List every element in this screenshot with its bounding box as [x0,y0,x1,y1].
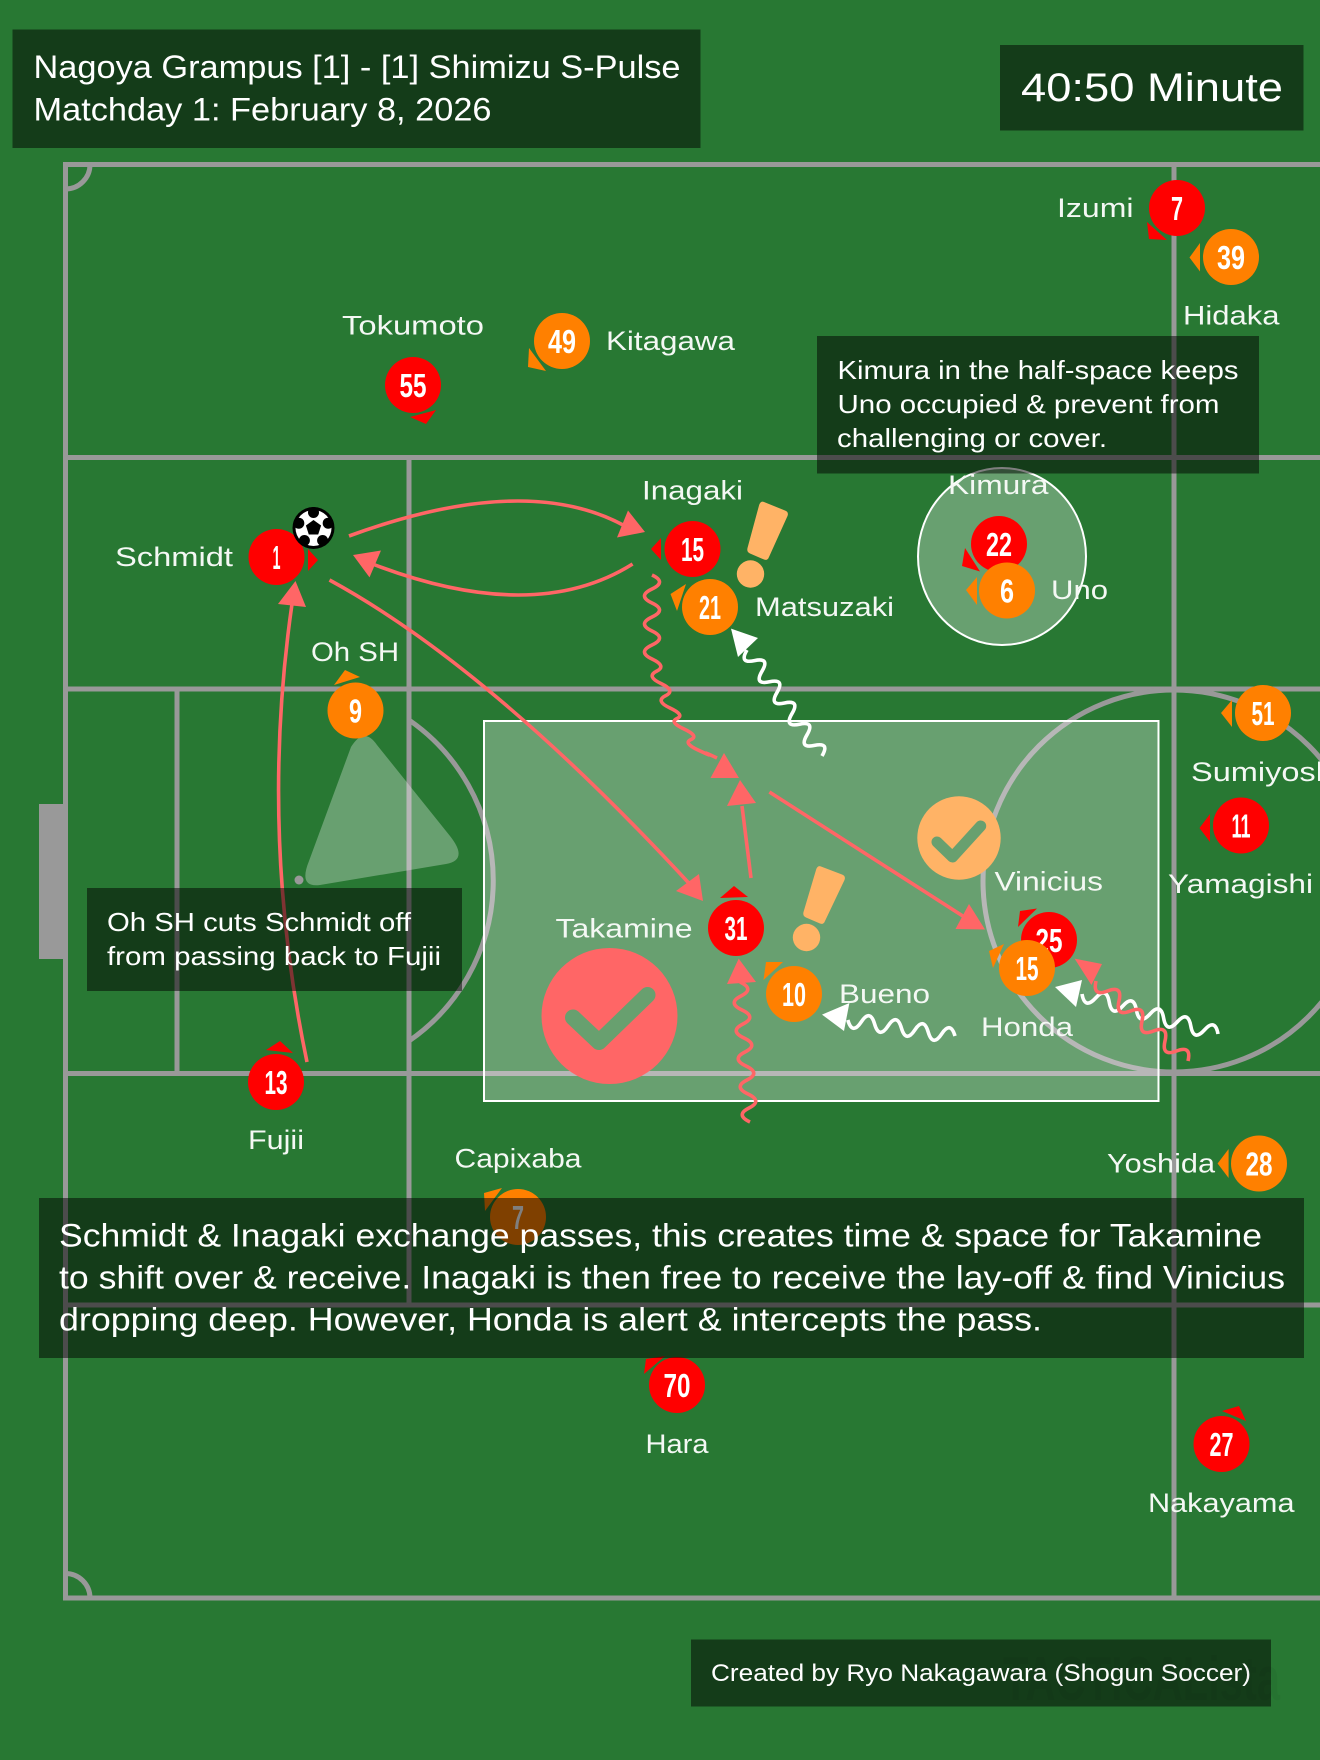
icon: check mark for Vinicius [917,796,1001,880]
title text [34,49,680,128]
icon: large check mark for Takamine [542,948,678,1084]
icon: exclamation mark near Bueno [793,866,845,951]
player: Takamine 31 [556,886,764,956]
player: Nakayama 27: 27 [1210,1426,1234,1463]
name label: Oh SH [311,637,399,667]
name label: Inagaki [642,476,743,506]
player: Kitagawa 49 [528,313,736,371]
description text: dropping deep. However, Honda is alert & intercepts the pass. [59,1302,1042,1338]
player: Nakayama 27 [1148,1406,1296,1518]
panel: main description [39,1198,1304,1358]
player: Fujii 13: 13 [264,1064,288,1101]
player: Izumi 7 [1057,180,1205,240]
player: Capixaba 7: 7 [512,1199,524,1236]
highlighted zone: space between the lines [484,721,1158,1101]
name label: Izumi [1057,193,1134,223]
player: Inagaki 15: 15 [681,531,704,568]
name label: Yoshida [1107,1148,1216,1178]
title text: Nagoya Grampus [1] - [1] Shimizu S-Pulse [34,49,680,85]
highlighted circle: Kimura and Uno [918,468,1086,645]
player: Schmidt 1 [115,529,318,585]
icon: exclamation mark near Matsuzaki [737,502,788,588]
panel: Kimura callout [817,336,1259,474]
player: Inagaki 15 [642,476,743,577]
player: Schmidt 1: 1 [272,539,280,576]
player: Vinicius 25: 25 [1036,922,1062,959]
name label: Kitagawa [606,326,736,356]
name label: Matsuzaki [755,592,894,622]
player: Sumiyoshi 51: 51 [1252,695,1274,732]
player: Tokumoto 55 [342,310,484,424]
description text: to shift over & receive. Inagaki is then free to receive the lay-off & find Vinicius [59,1260,1285,1296]
description text: Schmidt & Inagaki exchange passes, this creates time & space for Takamine [59,1218,1262,1254]
icon: soccer ball [292,507,334,549]
name label: Sumiyoshi [1191,757,1320,787]
player: Hidaka 39: 39 [1217,239,1245,276]
player: Oh SH 9: 9 [349,692,362,730]
player: Takamine 31: 31 [724,910,748,947]
player: Fujii 13 [248,1041,304,1155]
player: Kimura 22 [948,470,1050,572]
name label: Hara [646,1429,710,1459]
name label: Tokumoto [342,310,484,340]
name label: Fujii [248,1125,304,1155]
panel: Oh SH callout [87,888,462,991]
name label: Uno [1051,575,1108,605]
player: Hara 70: 70 [664,1367,690,1404]
description text [59,1218,1285,1338]
name label: Bueno [839,979,930,1009]
player: Hidaka 39 [1183,229,1281,330]
football pitch markings [39,164,1320,1598]
arrow: Schmidt pass to Takamine [330,580,703,901]
name label: Yamagishi [1168,869,1313,899]
cover shadow triangle of Oh SH [305,736,459,885]
player: Sumiyoshi 51 [1191,685,1320,787]
callout text [107,907,441,971]
player: Bueno 10 [764,962,930,1022]
player: Yamagishi 11: 11 [1232,808,1250,844]
credit text: Created by Ryo Nakagawara (Shogun Soccer) [711,1660,1251,1687]
name label: Nakayama [1148,1488,1296,1518]
callout text: Oh SH cuts Schmidt off [107,907,412,937]
player: Uno 6: 6 [1000,572,1014,610]
name label: Takamine [556,914,692,944]
player: Kimura 22: 22 [986,526,1012,563]
panel: credit [691,1640,1271,1706]
player: Capixaba 7 [454,1144,583,1245]
player: Tokumoto 55: 55 [400,367,426,404]
callout text: Kimura in the half-space keeps [838,355,1238,385]
arrow: Inagaki pass to Vinicius [769,792,985,930]
arrow: Inagaki pass to Schmidt [353,550,633,595]
player: Oh SH 9 [311,637,399,738]
player: Yoshida 28 [1107,1136,1287,1192]
player: Matsuzaki 21 [670,579,894,635]
panel: match minute [1000,45,1304,130]
panel: match title [12,30,700,148]
player: Matsuzaki 21: 21 [699,589,721,626]
player: Kitagawa 49: 49 [548,323,576,360]
player: Bueno 10: 10 [782,976,806,1013]
run arrow: Matsuzaki pressing [731,629,825,756]
run arrow: Honda intercepting [1055,980,1218,1035]
name label: Honda [981,1012,1074,1042]
name label: Hidaka [1183,300,1281,330]
name label: Kimura [948,470,1050,500]
name label: Capixaba [454,1144,583,1174]
player: Uno 6 [966,562,1108,618]
player: Hara 70 [644,1356,710,1459]
player: Vinicius 25 [994,866,1103,968]
name label: Schmidt [115,542,234,572]
run arrow: Bueno pressing [822,1003,955,1040]
player: Honda 15: 15 [1016,950,1038,987]
title text: Matchday 1: February 8, 2026 [34,92,492,128]
name label: Vinicius [994,866,1103,896]
callout text: challenging or cover. [837,423,1107,453]
run arrow: Takamine shifting over [727,959,756,1122]
player: Yoshida 28: 28 [1246,1146,1272,1182]
minute text: 40:50 Minute [1021,66,1283,110]
callout text: from passing back to Fujii [107,941,441,971]
player: Yamagishi 11 [1168,798,1313,899]
player: Honda 15 [981,940,1074,1042]
arrow: Schmidt pass to Inagaki [349,501,645,538]
callout text: Uno occupied & prevent from [838,389,1220,419]
arrow: Fujii pass to Schmidt [278,581,307,1062]
run arrow: Inagaki moving to receive lay-off [644,575,739,778]
player: Izumi 7: 7 [1171,190,1183,227]
run arrow: Vinicius dropping deep [1075,959,1189,1061]
arrow: Takamine lay-off [727,780,756,878]
callout text [837,355,1238,453]
